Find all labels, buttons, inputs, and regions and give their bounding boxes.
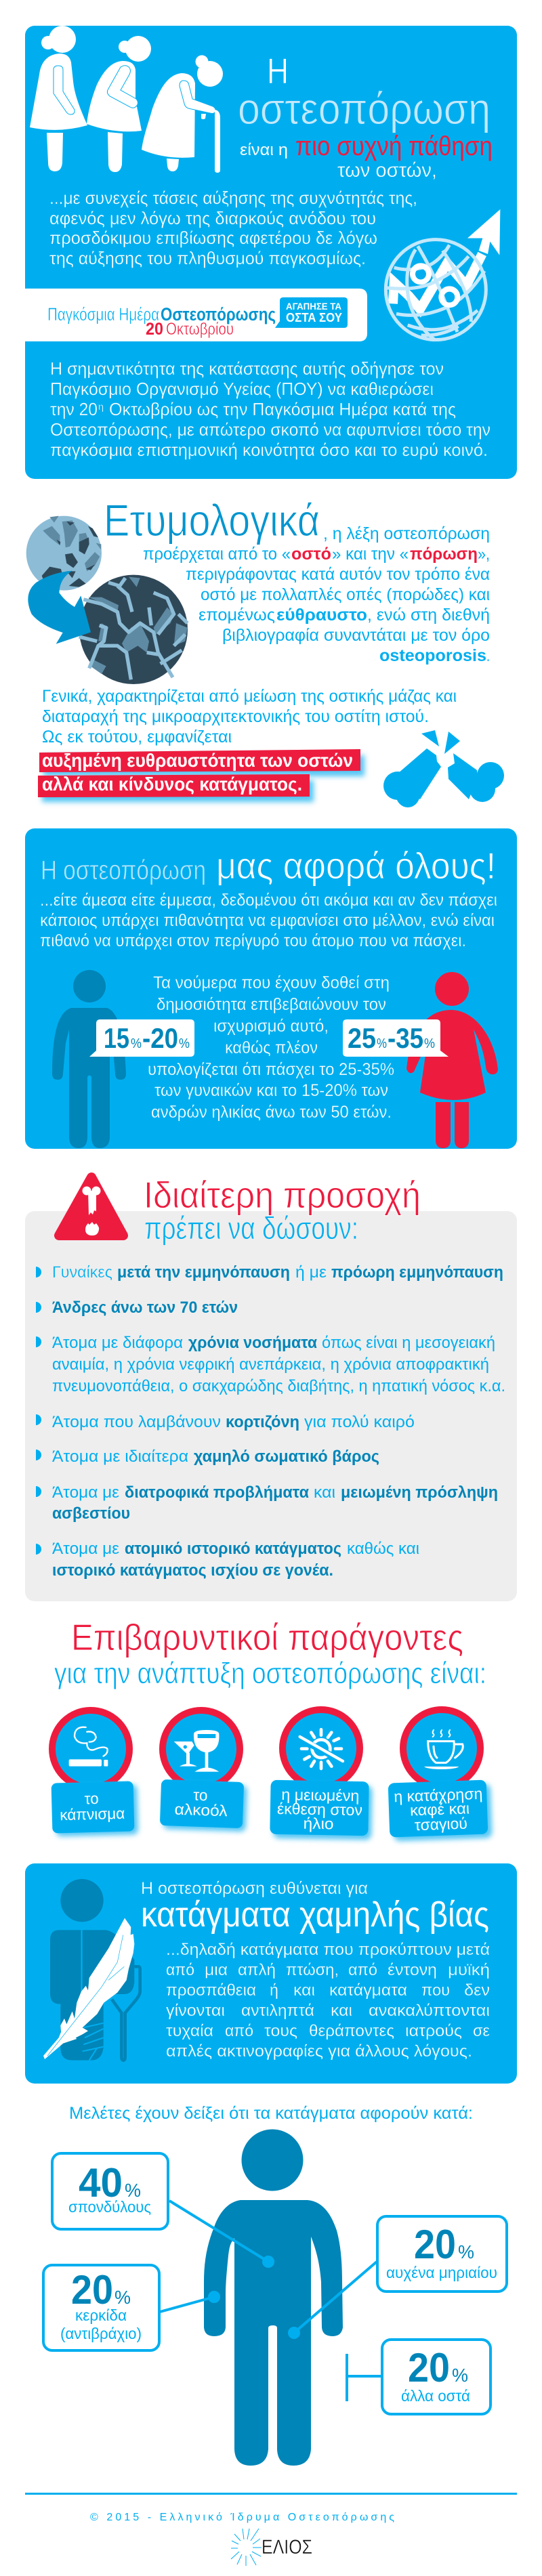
list: risk groups: Άτομα με διάφορα (52, 1334, 183, 1352)
banner: World Osteoporosis Day (25, 289, 367, 341)
heading: Ετυμολογικά: Ετυμολογικά (104, 495, 320, 545)
callout: women 25-35%: % (377, 1036, 387, 1051)
callout: women 25-35%: % (424, 1036, 435, 1051)
text block: word origin: », (478, 545, 490, 564)
subtitle: most common bone disease: είναι η (240, 141, 288, 159)
heading: aggravating factors: Επιβαρυντικοί παράγοντες (71, 1616, 463, 1658)
text block: explanation: μια (205, 1961, 228, 1979)
logo: Helios sunburst: ΕΛΙΟΣ (262, 2536, 312, 2558)
label: smoking: το (84, 1790, 99, 1807)
list: risk groups: όπως είναι η μεσογειακή (322, 1334, 495, 1352)
callout: vertebrae 40%: 40 (79, 2160, 123, 2205)
text block: rising trend: της αύξησης του πληθυσμού παγκοσμίως. (49, 248, 366, 268)
text block: World Health Organization: Η σημαντικότητα της κατάστασης αυτής οδήγησε τον (50, 358, 444, 379)
text block: rising trend: αφενός μεν λόγω της διαρκούς ανόδου του (49, 208, 376, 228)
text block: explanation: ανακαλύπτονται (369, 2002, 490, 2020)
text block: the numbers: των γυναικών και το 15-20% των (154, 1081, 388, 1100)
list: risk groups: ατομικό ιστορικό κατάγματος (125, 1540, 341, 1558)
text block: word origin: » και την « (332, 545, 409, 564)
icon: woman figure (406, 972, 498, 1148)
factor: smoking (51, 1710, 138, 1836)
icon: bullet markers (36, 1267, 41, 1555)
label: low sun exposure (270, 1780, 369, 1836)
panel: it concerns us all (25, 828, 517, 1149)
text block: general definition: Γενικά, χαρακτηρίζεται από μείωση της οστικής μάζας και (42, 687, 457, 706)
text block: explanation: από (166, 1961, 194, 1979)
text block: word origin: οστό (291, 545, 331, 564)
text block: World Health Organization (50, 358, 491, 460)
list: risk groups (36, 1263, 505, 1580)
callout: forearm 20% (43, 2265, 220, 2350)
text block: word origin: επομένως (199, 606, 275, 625)
heading: special attention: Ιδιαίτερη προσοχή (144, 1174, 421, 1216)
list: risk groups: διατροφικά προβλήματα (125, 1483, 309, 1502)
factor: alcohol (160, 1710, 247, 1832)
label: low sun exposure: έκθεση στον (277, 1800, 362, 1819)
text block: word origin: . (486, 646, 490, 665)
text block: the numbers: Τα νούμερα που έχουν δοθεί στη (153, 973, 390, 992)
text block: explanation: προσπάθεια (166, 1981, 256, 2000)
text block: directly or indirectly: ...είτε άμεσα είτε έμμεσα, δεδομένου ότι ακόμα και αν δεν πάσχει (40, 891, 497, 910)
text block: explanation: έντονη (388, 1961, 437, 1979)
callout: women 25-35%: 25 (348, 1022, 376, 1054)
text block: explanation: πτώση, (286, 1961, 339, 1979)
label: smoking: κάπνισμα (60, 1804, 125, 1823)
logo: Helios sunburst (231, 2529, 312, 2566)
callout: femoral neck 20%: % (458, 2241, 474, 2262)
icon: broken bone (383, 730, 504, 807)
heading: special attention: πρέπει να δώσουν: (144, 1210, 358, 1246)
list: risk groups: ιστορικό κατάγματος ισχίου σε γονέα. (52, 1561, 333, 1580)
callout: femoral neck 20%: αυχένα μηριαίου (386, 2264, 497, 2281)
list: risk groups: ασβεστίου (52, 1504, 130, 1523)
banner: World Osteoporosis Day: Παγκόσμια Ημέρα (47, 304, 159, 324)
callout: men 15-20%: -20 (142, 1022, 178, 1054)
text block: explanation: θεράποντες (309, 2022, 394, 2040)
text block: rising trend (49, 188, 417, 268)
label: alcohol (160, 1779, 244, 1828)
text block: explanation: και (331, 2002, 352, 2020)
icon: glasses (174, 1730, 219, 1772)
banner: World Osteoporosis Day: Οστεοπόρωσης (161, 304, 276, 324)
label: low sun exposure: ήλιο (303, 1815, 334, 1832)
list: risk groups: αναιμία, η χρόνια νεφρική ανεπάρκεια, η χρόνια αποφρακτική (52, 1355, 489, 1374)
list: risk groups: και (314, 1483, 335, 1502)
icon: globe with rising percent arrow (385, 209, 500, 340)
callout: increased fragility and fracture risk: αλλά και κίνδυνος κατάγματος. (42, 774, 302, 795)
label: coffee and tea: καφέ και (410, 1799, 470, 1819)
title: Η οστεοπόρωση: Η (267, 51, 289, 91)
callout: vertebrae 40%: % (125, 2180, 141, 2201)
list: risk groups: Άτομα με ιδιαίτερα (52, 1448, 188, 1466)
label: alcohol: το (193, 1786, 208, 1804)
list: risk groups: Άτομα με (52, 1483, 119, 1502)
list: risk groups: χαμηλό σωματικό βάρος (194, 1448, 379, 1466)
text block: explanation: σε (473, 2022, 490, 2040)
badge: love your bones (275, 297, 348, 328)
text block: explanation: τους (264, 2022, 297, 2040)
section: aggravating factors (51, 1616, 493, 1841)
text block: explanation: από (348, 1961, 377, 1979)
text block: World Health Organization: η (98, 401, 104, 412)
title: Η οστεοπόρωση (238, 51, 491, 133)
text block: word origin: , η λέξη οστεοπόρωση (323, 524, 490, 543)
panel: low-energy fractures (25, 1863, 517, 2084)
badge: love your bones: ΑΓΑΠΗΣΕ ΤΑ (286, 301, 341, 312)
text block: explanation: δεν (464, 1981, 490, 2000)
text block: general definition: Ως εκ τούτου, εμφανίζεται (42, 727, 232, 746)
callout: men 15-20%: % (131, 1036, 142, 1051)
text block: explanation: ή (270, 1981, 278, 2000)
list: risk groups: καθώς και (347, 1540, 419, 1558)
heading: μας αφορά όλους: Η οστεοπόρωση (41, 856, 206, 885)
callout: femoral neck 20% (288, 2216, 507, 2339)
factor: low sun exposure (270, 1710, 373, 1840)
subtitle: most common bone disease: πιο συχνή πάθηση (295, 131, 493, 161)
title: Η οστεοπόρωση: οστεοπόρωση (238, 84, 491, 133)
text block: the numbers: υπολογίζεται ότι πάσχει το 25-35% (148, 1060, 394, 1079)
heading: μας αφορά όλους: μας αφορά όλους! (216, 845, 496, 887)
text block: directly or indirectly (40, 891, 497, 950)
text block: World Health Organization: Οκτωβρίου ως την Παγκόσμια Ημέρα κατά της (109, 399, 456, 419)
text block: the numbers (148, 973, 394, 1122)
text block: word origin (143, 524, 490, 665)
text block: general definition (42, 687, 457, 746)
icon: man figure (52, 970, 126, 1148)
text block: general definition: διαταραχή της μικροαρχιτεκτονικής του οστίτη ιστού. (42, 707, 429, 726)
text block: explanation: ...δηλαδή κατάγματα που προκύπτουν μετά (166, 1941, 490, 1959)
banner: World Osteoporosis Day: Οκτωβρίου (166, 320, 234, 339)
text block: rising trend: ...με συνεχείς τάσεις αύξησης της συχνότητάς της, (49, 188, 417, 208)
callout: other bones 20%: άλλα οστά (401, 2387, 470, 2405)
list: risk groups: χρόνια νοσήματα (188, 1334, 317, 1352)
text block: word origin: , ενώ στη διεθνή (367, 606, 490, 625)
callout: femoral neck 20%: 20 (414, 2222, 456, 2267)
callout: men 15-20%: % (179, 1036, 190, 1051)
icon: cigarette (69, 1727, 108, 1767)
banner: World Osteoporosis Day: 20 (146, 320, 163, 339)
callout: increased fragility and fracture risk (38, 749, 364, 802)
icon: crossed-out sun (297, 1729, 343, 1769)
label: coffee and tea: η κατάχρηση (394, 1785, 483, 1805)
heading: studies have shown: Μελέτες έχουν δείξει ότι τα κατάγματα αφορούν κατά: (69, 2104, 473, 2123)
callout: other bones 20% (347, 2340, 491, 2414)
footer: copyright: © 2015 - Ελληνικό Ίδρυμα Οστεοπόρωσης (90, 2512, 394, 2523)
heading: low-energy fractures: Η οστεοπόρωση ευθύνεται για (141, 1879, 368, 1898)
callout: forearm 20%: κερκίδα (75, 2306, 127, 2324)
text block: World Health Organization: Παγκόσμιο Οργανισμό Υγείας (ΠΟΥ) να καθιερώσει (50, 379, 434, 399)
text block: explanation: απλή (238, 1961, 276, 1979)
icon: coffee cup (425, 1730, 463, 1769)
text block: explanation: από (225, 2022, 253, 2040)
label: smoking (51, 1781, 134, 1834)
label: alcohol: αλκοόλ (174, 1800, 228, 1819)
heading: special attention (144, 1174, 421, 1246)
text block: word origin: βιβλιογραφία συναντάται με τον όρο (222, 626, 490, 645)
label: coffee and tea (388, 1780, 488, 1838)
heading: μας αφορά όλους (41, 845, 496, 887)
text block: explanation: και (293, 1981, 315, 2000)
section: etymology (26, 495, 504, 807)
list: risk groups: κορτιζόνη (226, 1413, 299, 1431)
text block: word origin: οστό με πολλαπλές οπές (πορώδες) και (201, 585, 490, 604)
callout: women 25-35% (343, 1019, 449, 1057)
icon: man with crutch and feather (43, 1879, 140, 2061)
callout: forearm 20%: (αντιβράχιο) (60, 2325, 142, 2342)
section: fracture sites (43, 2104, 507, 2466)
list: risk groups: πρόωρη εμμηνόπαυση (331, 1263, 503, 1282)
list: risk groups: Άτομα που λαμβάνουν (52, 1413, 221, 1431)
label: low sun exposure: η μειωμένη (281, 1786, 360, 1804)
list: risk groups: πνευμονοπάθεια, ο σακχαρώδης διαβήτης, η ηπατική νόσος κ.α. (52, 1377, 505, 1395)
text block: explanation: απλές ακτινογραφίες για άλλους λόγους. (166, 2042, 472, 2061)
callout: men 15-20%: 15 (104, 1022, 129, 1054)
heading: low-energy fractures: κατάγματα χαμηλής βίας (141, 1895, 489, 1935)
icon: three elderly women with bent posture (30, 26, 223, 173)
list: risk groups: Άνδρες άνω των 70 ετών (52, 1298, 238, 1317)
text block: World Health Organization: παγκόσμια επιστημονική κοινότητα όσο και το ευρύ κοινό. (50, 440, 488, 460)
text block: explanation: μυϊκή (448, 1961, 490, 1979)
list: risk groups: Γυναίκες (52, 1263, 112, 1282)
panel: intro (25, 26, 517, 479)
text block: word origin: περιγράφοντας κατά αυτόν τον τρόπο ένα (186, 565, 490, 584)
text block: directly or indirectly: κάποιος υπάρχει πιθανότητα να εμφανίσει στο μέλλον, ενώ είναι (40, 911, 495, 930)
icon: human figure (204, 2130, 343, 2466)
list: risk groups: Άτομα με (52, 1540, 119, 1558)
label: coffee and tea: τσαγιού (414, 1815, 467, 1834)
callout: forearm 20%: 20 (71, 2267, 113, 2313)
icon: warning triangle with broken bone (59, 1177, 123, 1236)
heading: aggravating factors (54, 1616, 486, 1690)
text block: word origin: προέρχεται από το « (143, 545, 291, 564)
text block: explanation: που (421, 1981, 450, 2000)
list: risk groups: μετά την εμμηνόπαυση (117, 1263, 290, 1282)
text block: directly or indirectly: πιθανό να υπάρχει στον περίγυρό του άτομο που να πάσχει. (40, 931, 466, 950)
badge: love your bones: ΟΣΤΑ ΣΟΥ (286, 311, 342, 324)
text block: explanation: τυχαία (166, 2022, 213, 2040)
list: risk groups: μειωμένη πρόσληψη (341, 1483, 498, 1502)
panel: special attention (25, 1174, 517, 1601)
heading: low-energy fractures (141, 1879, 489, 1935)
callout: other bones 20%: 20 (408, 2345, 450, 2390)
text block: explanation (166, 1941, 490, 2061)
text block: explanation: αντιληπτά (241, 2002, 314, 2020)
text block: the numbers: ισχυρισμό αυτό, (213, 1017, 329, 1036)
text block: the numbers: καθώς πλέον (225, 1038, 318, 1057)
text block: explanation: γίνονται (166, 2002, 225, 2020)
text block: word origin: osteoporosis (379, 646, 486, 665)
callout: other bones 20%: % (452, 2365, 468, 2386)
text block: rising trend: προσδόκιμου επιβίωσης αφετέρου δε λόγω (49, 228, 377, 248)
callout: forearm 20%: % (114, 2287, 131, 2308)
callout: women 25-35%: -35 (388, 1022, 423, 1054)
list: risk groups: ή με (295, 1263, 327, 1282)
subtitle: most common bone disease (240, 131, 493, 182)
text block: explanation: ιατρούς (405, 2022, 462, 2040)
text block: the numbers: ανδρών ηλικίας άνω των 50 ετών. (151, 1103, 392, 1122)
text block: word origin: εύθραυστο (276, 606, 367, 625)
list: risk groups: για πολύ καιρό (304, 1413, 415, 1431)
text block: World Health Organization: την 20 (50, 399, 98, 419)
icon: healthy and porous bone with arrow (26, 516, 188, 684)
callout: vertebrae 40%: σπονδύλους (68, 2198, 151, 2216)
callout: increased fragility and fracture risk: αυξημένη ευθραυστότητα των οστών (42, 750, 353, 771)
text block: World Health Organization: Οστεοπόρωσης, με απώτερο σκοπό να αφυπνίσει τόσο την (50, 419, 491, 440)
callout: vertebrae 40% (52, 2153, 274, 2268)
text block: the numbers: δημοσιότητα επιβεβαιώνουν τον (157, 995, 386, 1014)
callout: men 15-20% (89, 1019, 194, 1057)
text block: explanation: κατάγματα (329, 1981, 407, 2000)
text block: word origin: πόρωση (410, 545, 478, 564)
subtitle: most common bone disease: των οστών, (337, 159, 437, 182)
factor: coffee and tea (388, 1710, 493, 1841)
